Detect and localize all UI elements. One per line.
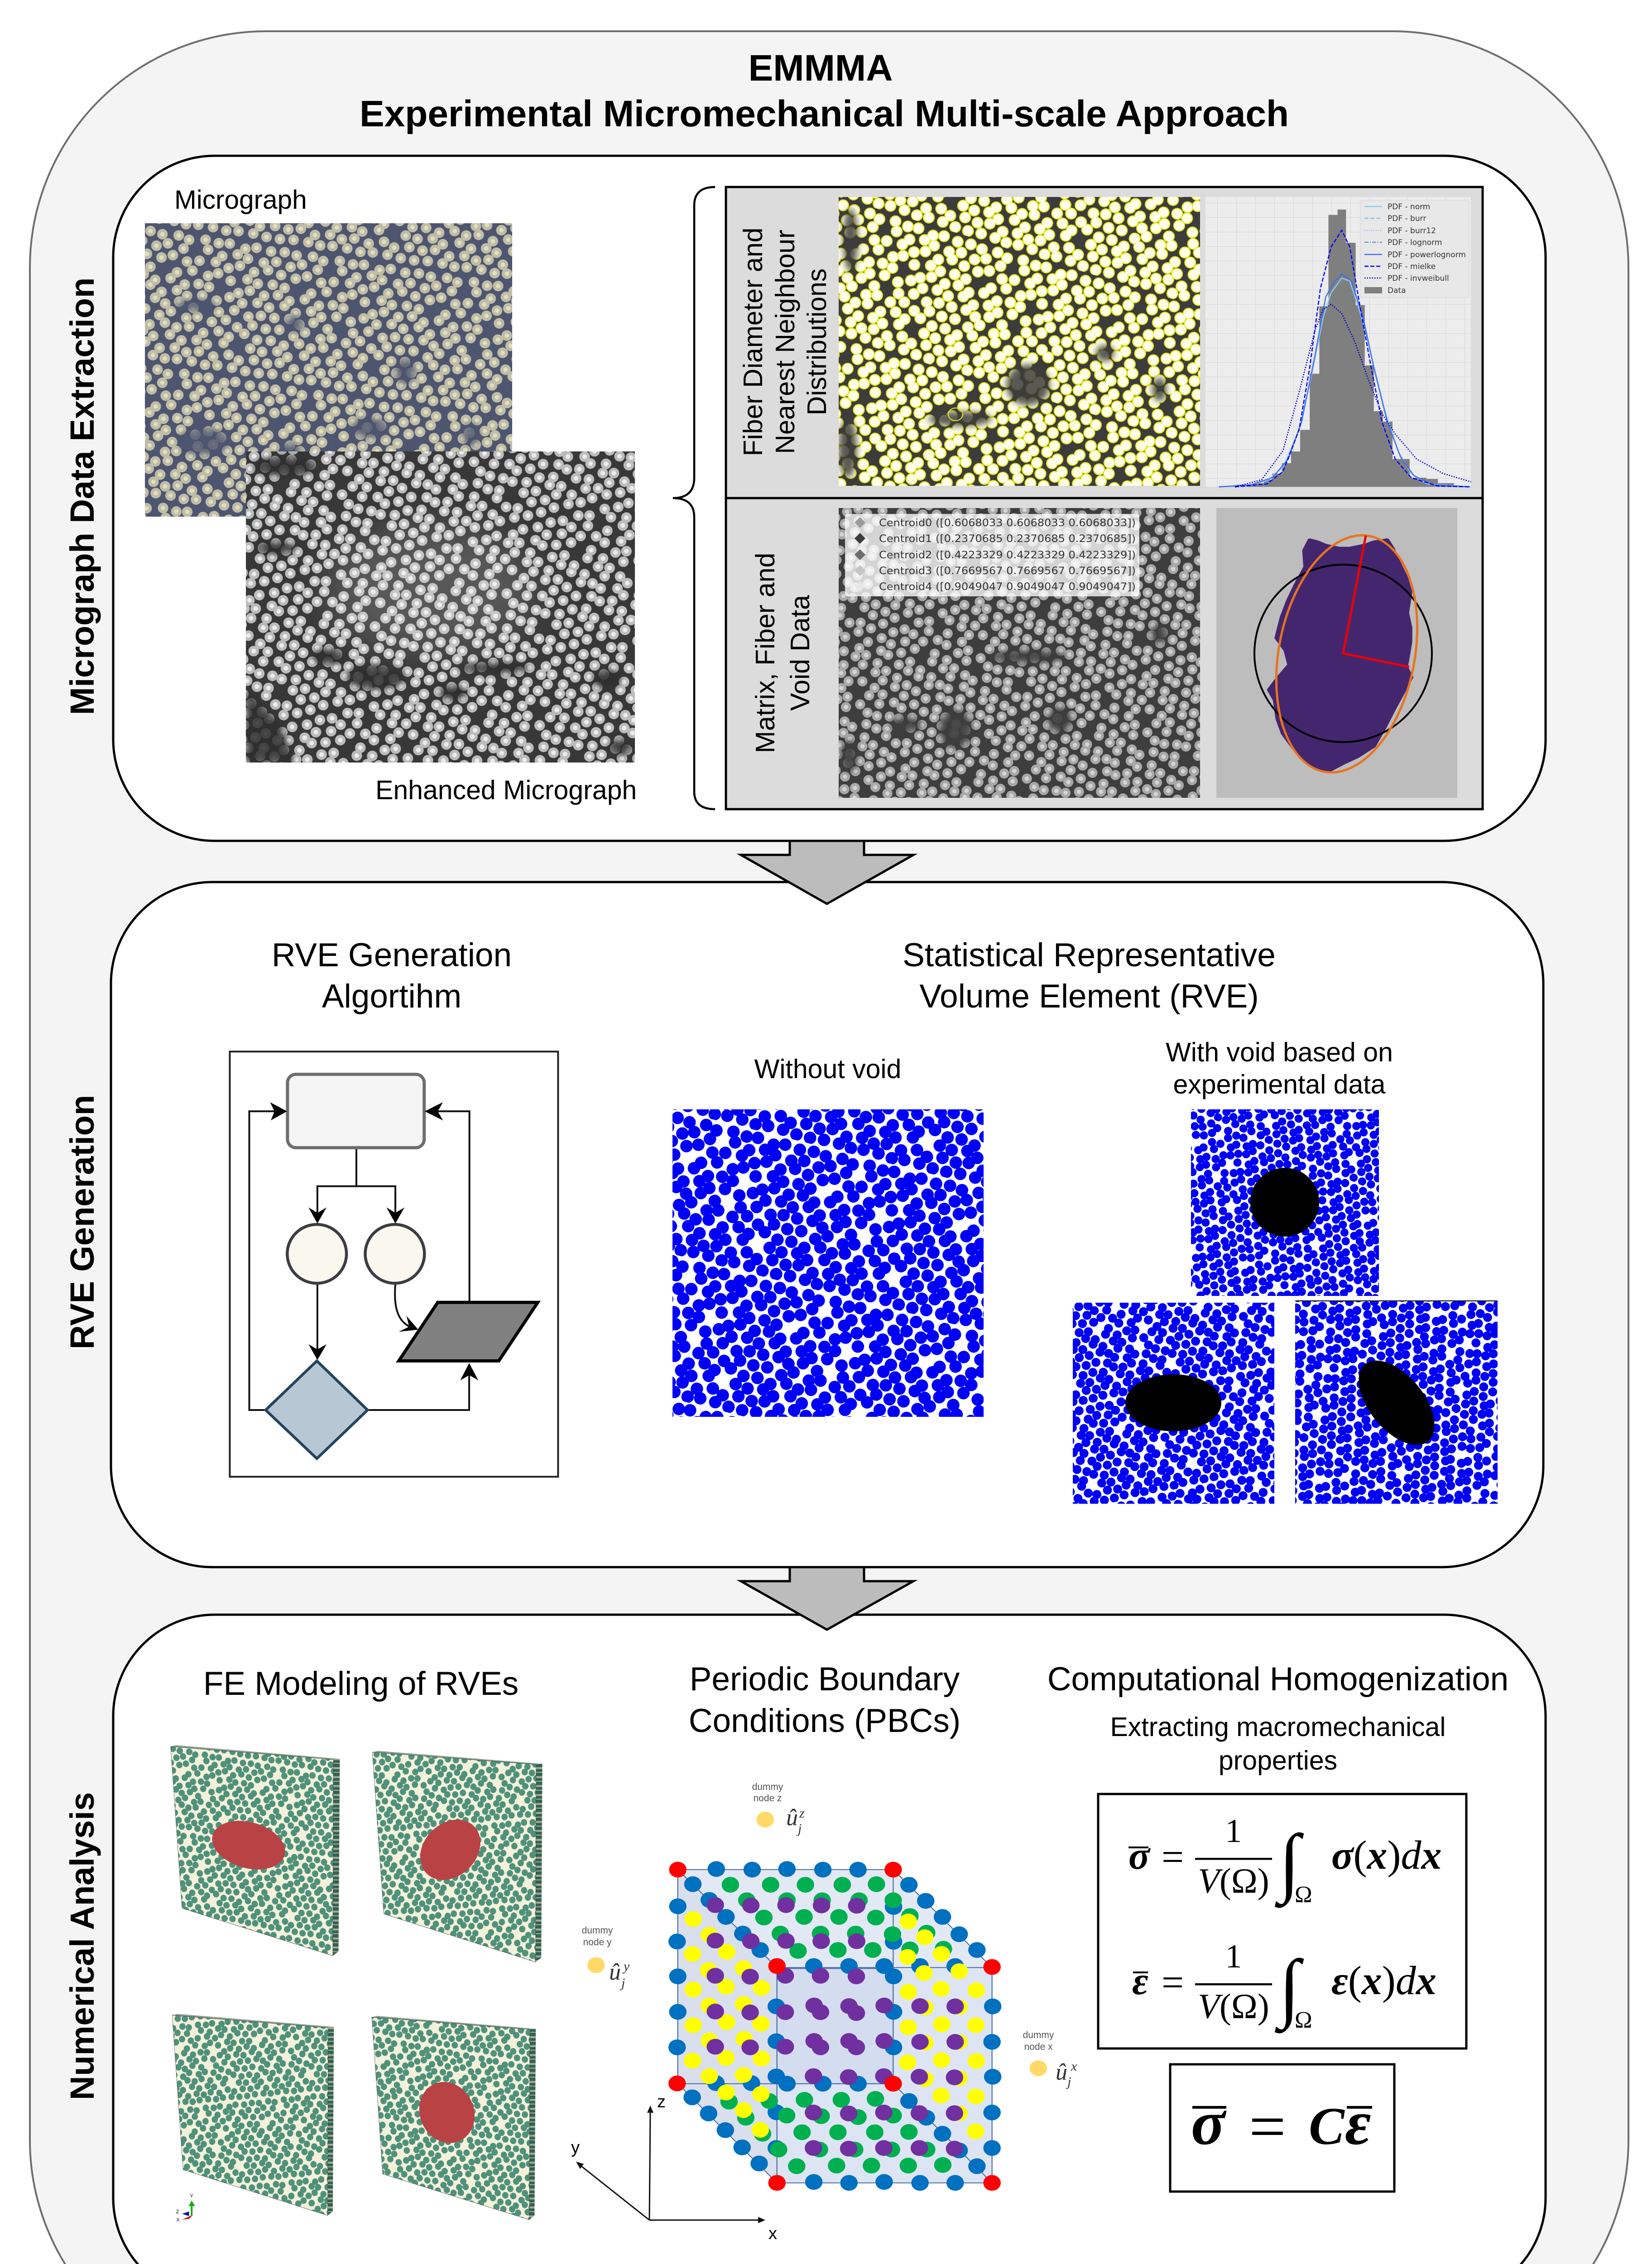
strain average formula: ε(x)dx <box>1331 1958 1436 2003</box>
formula box: constitutive relation: ε <box>1345 2088 1371 2158</box>
panel: micrograph data extraction <box>63 156 1546 841</box>
stress average formula <box>1129 1813 1441 1908</box>
stress average formula: Ω <box>1295 1882 1312 1908</box>
flowchart circle right <box>365 1224 424 1283</box>
strain average formula <box>1132 1938 1436 2034</box>
strain average formula: ε <box>1132 1959 1148 2003</box>
formula box: constitutive relation: σ <box>1191 2088 1227 2158</box>
label: dummy node x: x <box>1071 2059 1077 2074</box>
label: dummy node z: û <box>786 1805 798 1831</box>
FE plate: no void <box>172 2014 334 2216</box>
panel: RVE generation <box>63 882 1543 1567</box>
strain average formula: Ω <box>1295 2007 1312 2033</box>
chart: fiber distribution histogram with PDF fits <box>1205 197 1471 487</box>
label: dummy node x: node x <box>1024 2042 1053 2052</box>
coordinate axes: z <box>657 2092 666 2111</box>
text: extracting macromechanical properties <box>1110 1712 1446 1775</box>
arrow: micrograph to RVE generation <box>741 841 913 904</box>
title <box>360 48 1289 134</box>
purple face nodes <box>716 1905 955 2149</box>
coordinate axes: x <box>768 2224 777 2243</box>
label: dummy node z: node z <box>753 1793 782 1804</box>
title: Experimental Micromechanical Multi-scale Approach <box>360 93 1289 134</box>
strain average formula: = <box>1162 1960 1184 2004</box>
centroid legend: Centroid3 ([0.7669567 0.7669567 0.7669567]) <box>879 566 1136 577</box>
title: EMMMA <box>749 48 893 89</box>
label: dummy node x <box>1023 2030 1077 2089</box>
stress average formula: 1 <box>1225 1813 1242 1850</box>
label: matrix, fiber and void data <box>750 553 815 753</box>
coordinate triad <box>182 2201 195 2220</box>
heading: FE modeling of RVEs: FE Modeling of RVEs <box>203 1665 519 1702</box>
heading: statistical representative volume element <box>903 937 1276 1015</box>
chart legend: PDF - burr <box>1388 214 1426 223</box>
image: enhanced micrograph <box>246 451 635 763</box>
chart legend: PDF - lognorm <box>1388 238 1442 247</box>
stress average formula: = <box>1162 1835 1184 1879</box>
label: matrix, fiber and void data: Matrix, Fiber and <box>750 553 780 753</box>
dummy nodes <box>596 1820 1038 2068</box>
label: with void based on experimental data: experimental data <box>1173 1070 1386 1099</box>
label: dummy node y <box>582 1925 630 1991</box>
image: detected fibers with yellow outlines <box>839 197 1200 486</box>
image: raw micrograph <box>145 223 512 517</box>
chart legend: PDF - norm <box>1388 202 1430 211</box>
triad labels: Y <box>190 2193 193 2199</box>
strain average formula: ∫ <box>1274 1944 1304 2034</box>
flowchart parallelogram <box>399 1302 538 1361</box>
label: fiber diameter and nearest neighbour distributions: Fiber Diameter and <box>738 227 768 456</box>
chart: void shape with fitted ellipse <box>1216 508 1457 798</box>
label: dummy node y: j <box>620 1976 625 1991</box>
section label: RVE generation: RVE Generation <box>63 1095 101 1349</box>
flowchart: RVE generation algorithm <box>230 1051 558 1477</box>
stress average formula: σ <box>1129 1833 1151 1877</box>
text: extracting macromechanical properties: properties <box>1219 1746 1337 1775</box>
green face nodes <box>729 1884 943 2166</box>
triad labels: Z <box>176 2209 179 2215</box>
label: fiber diameter and nearest neighbour distributions <box>738 227 832 456</box>
triad labels <box>176 2193 193 2223</box>
heading: statistical representative volume element: Volume Element (RVE) <box>919 978 1259 1015</box>
red corner nodes <box>677 1870 992 2183</box>
label: dummy node y: û <box>609 1959 621 1985</box>
blue edge nodes <box>677 1869 993 2183</box>
FE plate: horizontal elliptical void <box>171 1745 340 1956</box>
label: dummy node x: dummy <box>1023 2030 1054 2040</box>
label: with void based on experimental data <box>1166 1037 1393 1099</box>
label: with void based on experimental data: With void based on <box>1166 1037 1393 1067</box>
chart legend: PDF - mielke <box>1388 262 1436 271</box>
text: extracting macromechanical properties: Extracting macromechanical <box>1110 1712 1446 1742</box>
data box <box>726 187 1483 809</box>
label: matrix, fiber and void data: Void Data <box>785 595 815 711</box>
coordinate axes: y <box>571 2138 580 2157</box>
formula box: constitutive relation <box>1170 2064 1394 2192</box>
heading: statistical representative volume element: Statistical Representative <box>903 937 1276 974</box>
heading: computational homogenization: Computational Homogenization <box>1047 1661 1508 1698</box>
label: without void: Without void <box>754 1054 901 1084</box>
FE models of RVE plates <box>171 1745 543 2220</box>
flowchart decision diamond <box>266 1361 368 1458</box>
arrow: RVE generation to numerical analysis <box>741 1567 913 1630</box>
coordinate axes <box>571 2092 777 2243</box>
RVE with horizontal elliptical void <box>1073 1303 1274 1504</box>
label: fiber diameter and nearest neighbour distributions: Distributions <box>802 269 832 415</box>
section label: numerical analysis: Numerical Analysis <box>63 1792 101 2100</box>
flowchart start box <box>288 1074 424 1148</box>
strain average formula: V(Ω) <box>1198 1986 1269 2026</box>
image: clustered micrograph with centroid legend <box>839 508 1200 798</box>
flowchart circle left <box>287 1224 346 1283</box>
label: dummy node z: z <box>799 1806 805 1821</box>
label: dummy node z: dummy <box>752 1782 783 1792</box>
chart legend <box>1360 200 1469 297</box>
label: dummy node y: dummy <box>582 1925 613 1936</box>
heading: RVE generation algorithm: RVE Generation <box>272 937 512 974</box>
label: dummy node x: j <box>1066 2074 1071 2089</box>
RVE without void <box>672 1109 984 1417</box>
formula box: constitutive relation: C <box>1309 2096 1345 2156</box>
section label: micrograph data extraction: Micrograph Data Extraction <box>63 278 101 715</box>
label: dummy node x: û <box>1056 2059 1067 2085</box>
chart legend: PDF - invweibull <box>1388 274 1449 283</box>
RVE with circular void <box>1191 1109 1379 1296</box>
centroid legend: Centroid1 ([0.2370685 0.2370685 0.2370685]) <box>879 533 1136 545</box>
triad labels: X <box>176 2217 180 2223</box>
formula box: volume averages <box>1098 1794 1466 2048</box>
centroid legend: Centroid2 ([0.4223329 0.4223329 0.4223329]) <box>879 550 1136 561</box>
chart legend: PDF - powerlognorm <box>1388 250 1466 259</box>
label: fiber diameter and nearest neighbour distributions: Nearest Neighbour <box>770 230 800 454</box>
heading: RVE generation algorithm <box>272 937 512 1015</box>
label: dummy node z <box>752 1782 805 1836</box>
fitted curves <box>1219 230 1471 487</box>
label: dummy node y: node y <box>583 1937 612 1947</box>
label: dummy node y: y <box>622 1959 630 1974</box>
heading: periodic boundary conditions <box>689 1661 960 1739</box>
histogram bars <box>1219 210 1470 487</box>
strain average formula: 1 <box>1225 1938 1242 1975</box>
chart legend: PDF - burr12 <box>1388 226 1436 235</box>
heading: RVE generation algorithm: Algortihm <box>322 978 461 1015</box>
FE plate: tilted elliptical void <box>372 1751 543 1962</box>
diagram: periodic boundary cube <box>596 1820 1038 2183</box>
chart legend: Data <box>1388 286 1406 295</box>
stress average formula: ∫ <box>1274 1819 1304 1908</box>
heading: periodic boundary conditions: Conditions (PBCs) <box>689 1703 960 1739</box>
curly brace <box>673 187 715 809</box>
panel: numerical analysis <box>63 1615 1546 2264</box>
label: enhanced micrograph: Enhanced Micrograph <box>375 775 637 805</box>
FE plate: rounded void <box>372 2016 536 2220</box>
centroid legend: Centroid4 ([0.9049047 0.9049047 0.9049047]) <box>879 581 1136 593</box>
stress average formula: σ(x)dx <box>1331 1833 1441 1878</box>
centroid legend <box>845 514 1139 596</box>
centroid legend: Centroid0 ([0.6068033 0.6068033 0.6068033]) <box>879 518 1136 529</box>
label: micrograph: Micrograph <box>174 185 307 215</box>
cube faces <box>678 1870 992 2183</box>
heading: periodic boundary conditions: Periodic Boundary <box>690 1661 960 1698</box>
flowchart arrowheads <box>270 1102 478 1380</box>
yellow face nodes <box>692 1919 976 2131</box>
RVE with tilted elliptical void <box>1295 1301 1498 1504</box>
label: dummy node z: j <box>796 1821 802 1836</box>
stress average formula: V(Ω) <box>1198 1861 1269 1900</box>
formula box: constitutive relation: = <box>1249 2091 1286 2163</box>
